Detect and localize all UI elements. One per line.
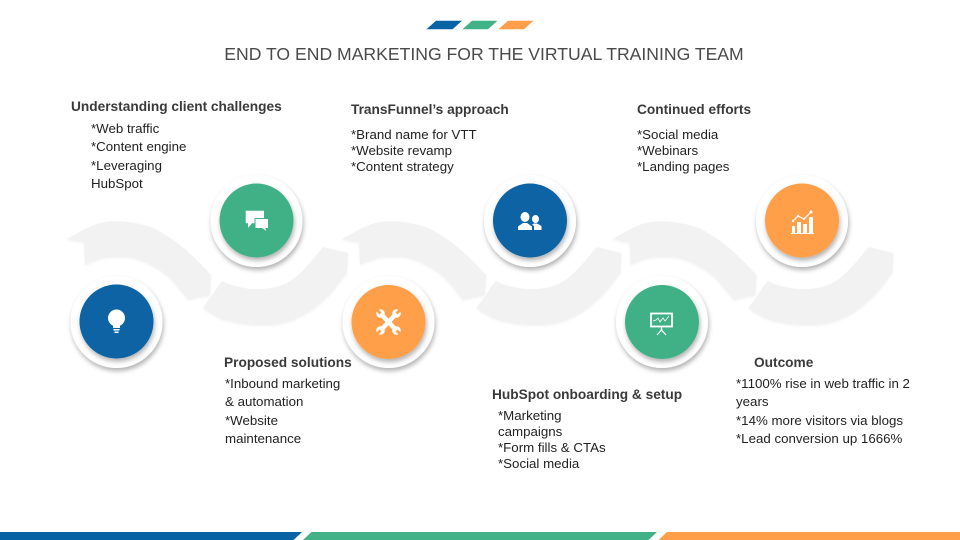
- text: solutions list: [225, 376, 340, 446]
- text: solutions list: *Website: [225, 413, 278, 428]
- title: END TO END MARKETING FOR THE VIRTUAL TRAINING TEAM: [224, 44, 744, 64]
- circle: presentation (green): [616, 276, 708, 368]
- text: continued efforts list: [637, 127, 729, 174]
- heading: Understanding client challenges: Understanding client challenges: [71, 99, 282, 114]
- text: outcome list: *1100% rise in web traffic in 2: [736, 376, 910, 391]
- text: continued efforts list: *Webinars: [637, 143, 698, 158]
- text: onboarding list: [498, 408, 606, 471]
- text: solutions list: *Inbound marketing: [225, 376, 340, 391]
- text: onboarding list: *Marketing: [498, 408, 562, 423]
- logo marks: [426, 21, 534, 29]
- icon: presentation board: [651, 314, 672, 335]
- text: approach list: [351, 127, 477, 174]
- text: client challenges list: *Web traffic: [91, 121, 159, 136]
- circle: idea (blue): [70, 276, 162, 368]
- arrows: wave ribbon: [66, 221, 894, 325]
- text: continued efforts list: *Social media: [637, 127, 718, 142]
- circle: chat (green): [210, 175, 302, 267]
- footer bar: [0, 532, 960, 540]
- text: approach list: *Content strategy: [351, 159, 454, 174]
- circle: people (blue): [484, 175, 576, 267]
- text: onboarding list: *Social media: [498, 456, 579, 471]
- circle: growth chart (orange): [756, 175, 848, 267]
- heading: TransFunnel's approach: TransFunnel’s approach: [351, 102, 509, 117]
- text: outcome list: years: [736, 394, 769, 409]
- text: approach list: *Website revamp: [351, 143, 452, 158]
- text: solutions list: maintenance: [225, 431, 301, 446]
- heading: Outcome: Outcome: [754, 355, 813, 370]
- circle: tools (orange): [342, 276, 434, 368]
- text: continued efforts list: *Landing pages: [637, 159, 729, 174]
- icon: chat bubbles: [246, 211, 268, 232]
- arrow 6: [748, 247, 894, 325]
- text: client challenges list: [91, 121, 186, 191]
- icon: bar chart with trend line: [791, 210, 814, 234]
- heading: Proposed solutions: Proposed solutions: [224, 355, 352, 370]
- icon: two people: [518, 212, 542, 230]
- arrow 3: [342, 221, 486, 300]
- text: outcome list: *Lead conversion up 1666%: [736, 431, 902, 446]
- arrow 4: [476, 247, 622, 325]
- text: outcome list: [736, 376, 910, 446]
- text: outcome list: *14% more visitors via blogs: [736, 413, 903, 428]
- text: onboarding list: *Form fills & CTAs: [498, 440, 606, 455]
- heading: HubSpot onboarding & setup: HubSpot onboarding & setup: [492, 387, 682, 402]
- text: approach list: *Brand name for VTT: [351, 127, 477, 142]
- icon: light bulb: [108, 310, 125, 333]
- text: client challenges list: *Content engine: [91, 139, 186, 154]
- text: client challenges list: *Leveraging: [91, 158, 162, 173]
- text: onboarding list: campaigns: [498, 424, 562, 439]
- heading: Continued efforts: Continued efforts: [637, 102, 751, 117]
- text: solutions list: & automation: [225, 394, 303, 409]
- arrow 2: [203, 247, 348, 325]
- text: client challenges list: HubSpot: [91, 176, 143, 191]
- arrow 1: [66, 221, 211, 300]
- icon: crossed wrenches: [376, 309, 401, 335]
- arrow 5: [612, 221, 756, 300]
